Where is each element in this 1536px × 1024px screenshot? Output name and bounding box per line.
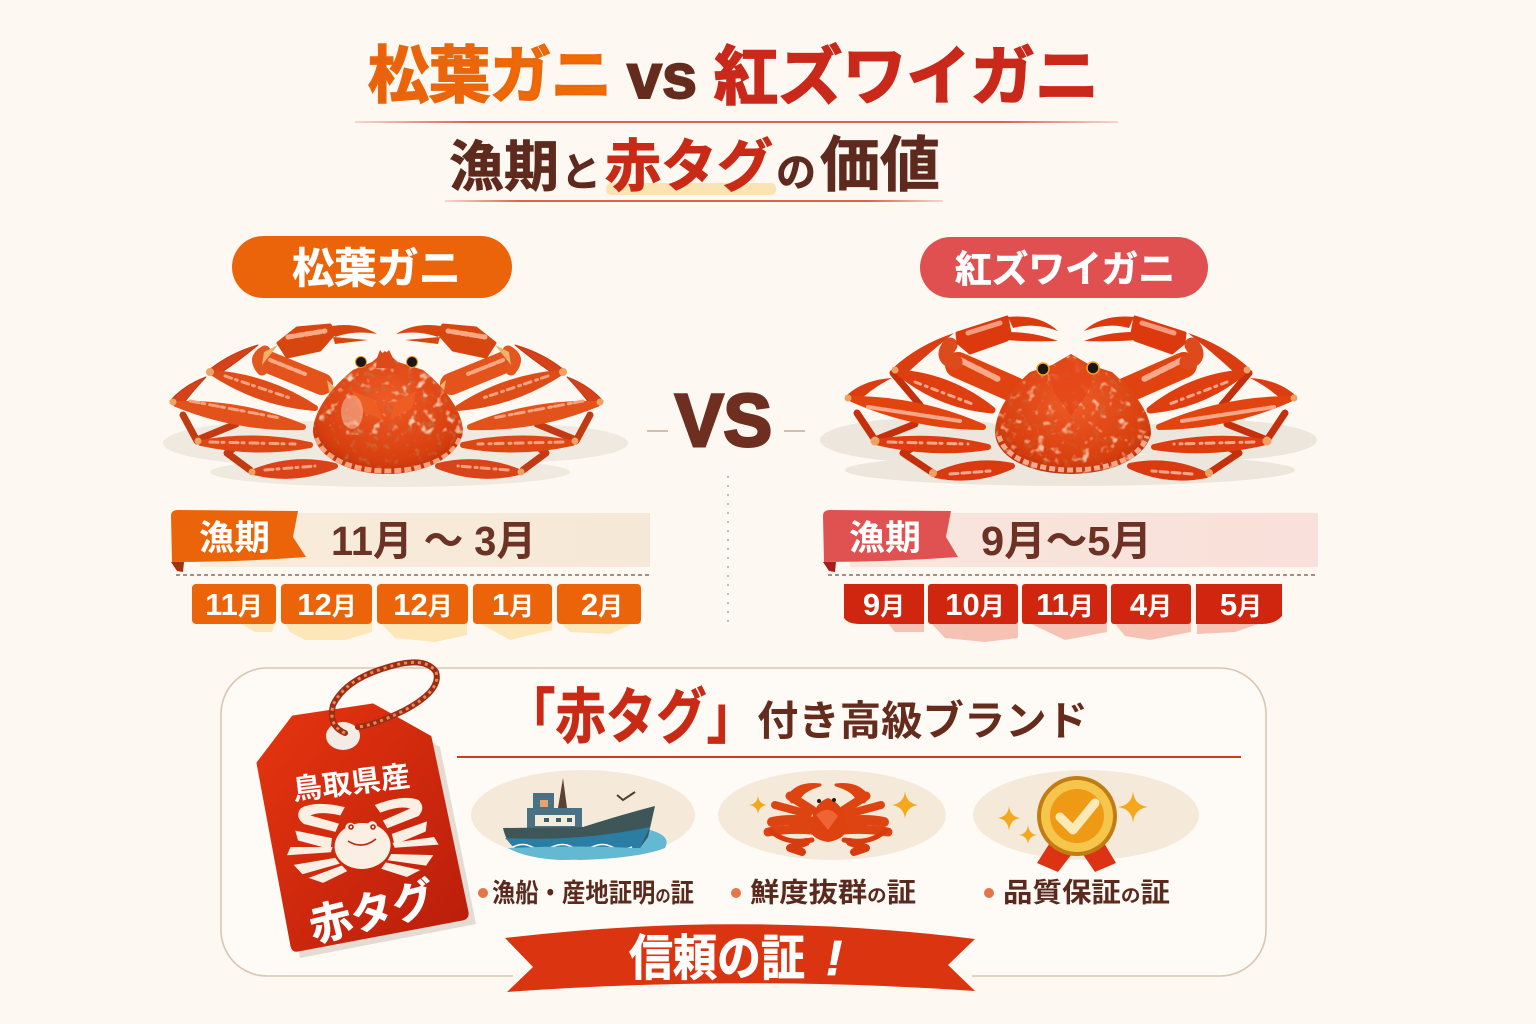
month chips: 松葉ガニ: 2月 <box>581 587 623 622</box>
subtitle: 漁期と赤タグの価値: 赤タグ <box>605 135 773 199</box>
ribbon banner: 信頼の証！ <box>505 924 975 992</box>
heading: 「赤タグ」付き高級ブランド: 付き高級ブランド <box>757 698 1088 744</box>
crab emblem <box>284 796 441 885</box>
tag text: 鳥取県産: 鳥取県産 <box>291 760 412 807</box>
pill: 紅ズワイガニ: 紅ズワイガニ <box>955 249 1175 290</box>
proof item: crab freshness: 鮮度抜群 の証 <box>750 878 916 908</box>
month chips: 紅ズワイガニ: 9月 <box>863 587 905 622</box>
month chips: 松葉ガニ <box>192 584 641 642</box>
ribbon <box>823 510 958 562</box>
season band: 松葉ガニ <box>171 510 650 572</box>
icon: small crab with sparkles <box>718 770 946 860</box>
month chips: 紅ズワイガニ: 5月 <box>1220 587 1262 622</box>
month chips: 松葉ガニ: 1月 <box>492 587 534 622</box>
subtitle: 漁期と赤タグの価値: の <box>776 151 816 195</box>
ribbon banner: 信頼の証！: 信頼の証 <box>629 932 805 986</box>
heading: 「赤タグ」付き高級ブランド: 「赤タグ」 <box>505 684 757 751</box>
title: line 1: 松葉ガニ <box>368 42 612 111</box>
pill: 紅ズワイガニ <box>920 237 1208 298</box>
title: line 1 <box>368 41 1099 113</box>
icon: boat <box>471 770 695 860</box>
title: line 1: 紅ズワイガニ <box>714 41 1099 113</box>
crab: 紅ズワイガニ <box>820 317 1317 486</box>
month chips: 紅ズワイガニ: 11月 <box>1036 587 1094 622</box>
subtitle: 漁期と赤タグの価値: 漁期 <box>449 136 559 198</box>
month chips: 松葉ガニ: 12月 <box>297 587 357 622</box>
proof item: quality medal <box>973 770 1199 908</box>
month chips: 紅ズワイガニ: 10月 <box>945 587 1005 622</box>
proof item: crab freshness <box>718 770 946 908</box>
crab carapace <box>313 351 463 474</box>
season range: 9月〜5月 <box>981 518 1152 564</box>
crab eyes <box>356 356 418 368</box>
tag body <box>258 705 467 950</box>
season band: 紅ズワイガニ: 漁期 <box>849 519 921 558</box>
string loop <box>332 662 437 733</box>
crab carapace <box>995 354 1151 474</box>
season band: 紅ズワイガニ <box>823 510 1318 572</box>
crab shadow <box>820 418 1317 486</box>
season range: 11月 〜 3月 <box>331 518 536 564</box>
pill: 松葉ガニ: 松葉ガニ <box>292 245 461 292</box>
crab: 松葉ガニ <box>163 325 628 487</box>
pill: 松葉ガニ <box>232 236 512 298</box>
month chips: 紅ズワイガニ <box>844 584 1282 642</box>
tag text: 赤タグ: 赤タグ <box>304 874 440 952</box>
proof item: fishing boat <box>471 770 695 908</box>
crab shadow <box>163 421 628 487</box>
title: line 1: vs <box>627 42 697 112</box>
ribbon banner: 信頼の証！: ! <box>826 932 842 986</box>
emblem face <box>348 825 376 845</box>
label <box>478 888 488 898</box>
VS mark: VS <box>675 379 772 462</box>
month chips: 松葉ガニ: 11月 <box>205 587 263 622</box>
label <box>731 888 741 898</box>
crab eyes <box>1037 362 1099 375</box>
subtitle: 漁期と赤タグの価値: 価値 <box>820 132 940 199</box>
ribbon <box>171 510 306 562</box>
subtitle: 漁期と赤タグの価値: と <box>561 151 601 195</box>
icon: gold medal <box>973 770 1199 872</box>
heading: 「赤タグ」付き高級ブランド <box>505 684 1088 751</box>
tag shadow <box>268 715 476 958</box>
tag hole <box>326 722 360 750</box>
month chips: 松葉ガニ: 12月 <box>393 587 453 622</box>
month chips: 紅ズワイガニ: 4月 <box>1130 587 1172 622</box>
proof item: quality medal: 品質保証 の証 <box>1003 878 1170 908</box>
panel: 赤タグ brand <box>221 668 1266 976</box>
red tag <box>258 662 476 958</box>
proof item: fishing boat: 漁船・産地証明の証 <box>492 878 694 908</box>
label <box>984 888 994 898</box>
subtitle: 漁期と赤タグの価値 <box>449 132 940 199</box>
highlight under 赤タグ <box>606 183 776 195</box>
season band: 松葉ガニ: 漁期 <box>199 519 270 558</box>
